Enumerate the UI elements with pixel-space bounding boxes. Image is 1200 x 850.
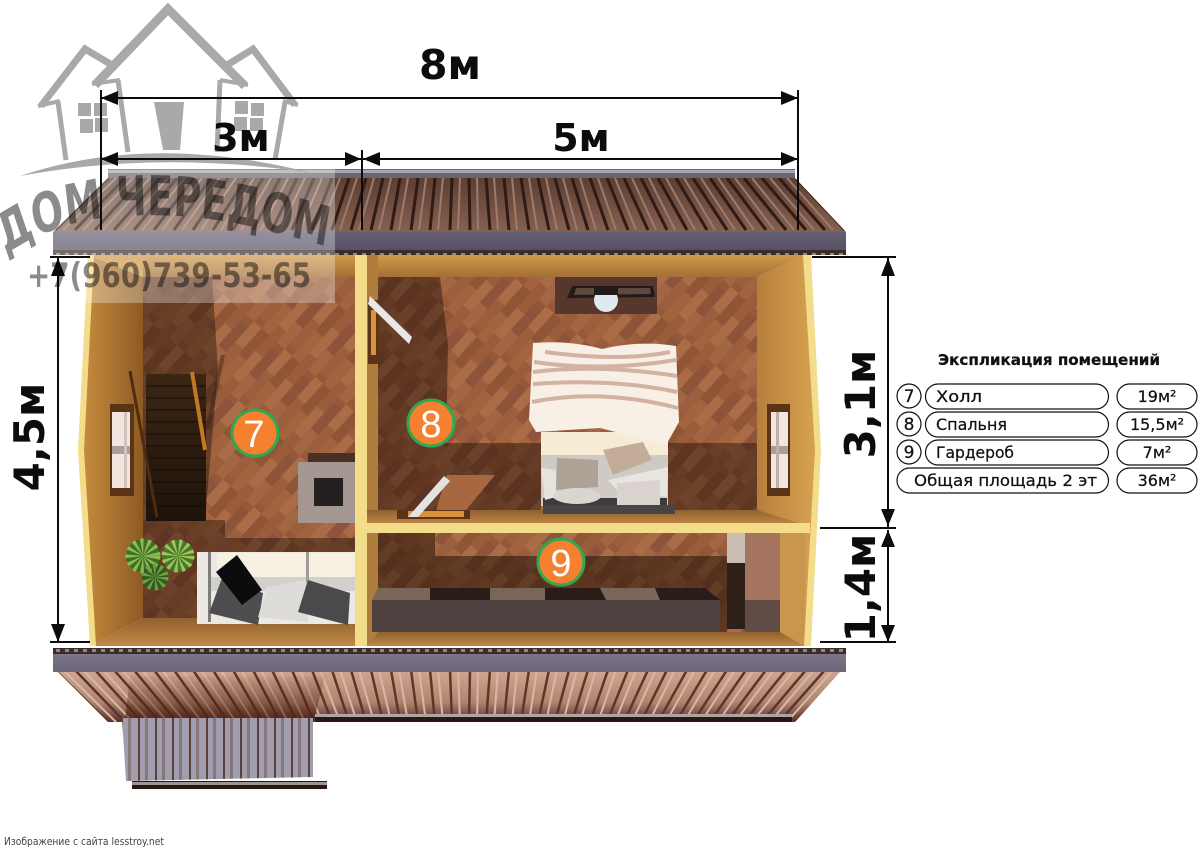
legend: room explication [897, 351, 1197, 493]
dimension: 3 m: 3м [212, 116, 270, 160]
dimension: 8 m overall width: 8м [419, 41, 481, 89]
legend row 7: Холл [936, 387, 982, 406]
room marker 7: 7 [243, 414, 265, 456]
bed [529, 342, 679, 514]
sofa [197, 552, 355, 625]
room 9 wardrobe floor [367, 533, 759, 633]
room marker 9 [538, 539, 584, 585]
legend row 8: Спальня [936, 415, 1007, 434]
room 8 bedroom floor [367, 255, 759, 513]
room marker 8 [408, 400, 454, 446]
legend total: Общая площадь 2 эт [914, 471, 1097, 490]
room 7 hall floor [143, 255, 356, 619]
room marker 9: 9 [550, 543, 572, 585]
dimension: 1,4 m [820, 530, 896, 642]
skylight lower [397, 476, 470, 519]
legend row 9: Гардероб [936, 443, 1014, 462]
interior floor plan [78, 255, 821, 646]
wardrobe shelves [372, 588, 720, 632]
legend title: Экспликация помещений [938, 351, 1160, 369]
legend row 8: 15,5м² [1130, 415, 1184, 434]
source credit: Изображение с сайта lesstroy.net [4, 835, 164, 848]
dimension: 4,5 m height [5, 257, 90, 642]
wardrobe closet [727, 533, 780, 632]
dimension: 1,4 m: 1,4м [836, 534, 885, 642]
porch roof [122, 718, 327, 789]
legend total: 36м² [1138, 471, 1176, 490]
skylight upper [368, 296, 412, 364]
dimension: 8 m overall width [101, 41, 798, 230]
dimension: 4,5 m height: 4,5м [5, 383, 54, 491]
room marker 8: 8 [420, 404, 442, 446]
dimension: 3 m [101, 116, 362, 230]
fireplace [298, 453, 355, 523]
legend row 9 [897, 440, 1197, 465]
legend row 7: 7 [904, 387, 914, 407]
watermark panel overlay [0, 168, 335, 303]
legend row 7: 19м² [1138, 387, 1176, 406]
watermark phone: +7(960)739-53-65 [27, 256, 311, 296]
legend total [897, 468, 1197, 493]
dimension: 3,1 m: 3,1м [836, 350, 885, 458]
yellow timber partitions [78, 255, 821, 646]
watermark logo: houses [20, 9, 312, 176]
room marker 7 [232, 410, 278, 456]
legend row 7 [897, 384, 1197, 409]
legend row 9: 7м² [1143, 443, 1171, 462]
legend row 8: 8 [904, 415, 914, 435]
staircase [130, 355, 223, 521]
plant [126, 539, 194, 590]
left window [110, 404, 134, 496]
dimension: 5 m [363, 116, 798, 166]
bedroom TV unit [555, 277, 657, 314]
wooden walls [80, 255, 818, 646]
top roof [53, 169, 853, 255]
legend row 8 [897, 412, 1197, 437]
dimension: 5 m: 5м [552, 116, 610, 160]
dimension: 3,1 m [812, 257, 896, 528]
legend row 9: 9 [904, 443, 914, 463]
right window [767, 404, 790, 496]
bottom roof [53, 648, 853, 722]
